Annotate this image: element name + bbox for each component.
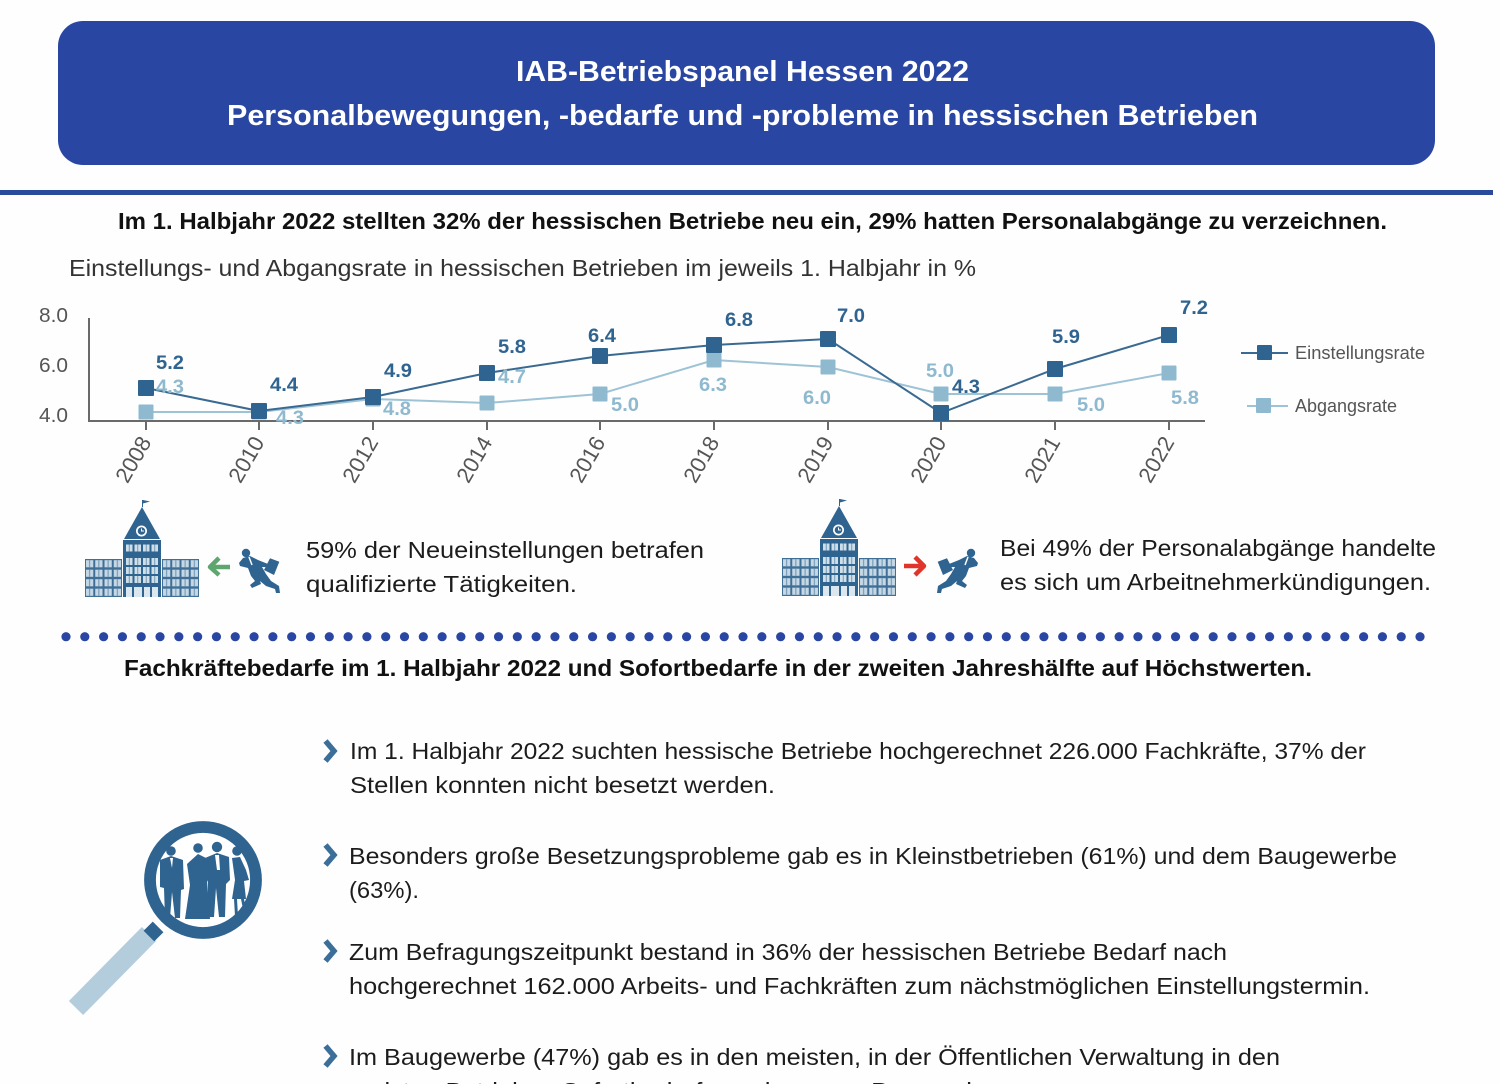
Abgangsrate value labels: [156, 361, 1199, 429]
Abgangsrate value labels: 4.7: [498, 367, 526, 388]
Abgangsrate value labels: 4.3: [156, 377, 184, 398]
chart title: Einstellungs- und Abgangsrate in hessischen Betrieben im jeweils 1. Halbjahr in %: [69, 255, 976, 281]
line chart: hiring and departure rates: [39, 298, 1425, 487]
Einstellungsrate value labels: 5.9: [1052, 327, 1080, 348]
x axis year labels: 2014: [451, 432, 497, 487]
Abgangsrate value labels: 6.0: [803, 388, 831, 409]
bullet: staffing problems: (63%).: [349, 877, 419, 903]
Einstellungsrate value labels: 4.3: [952, 377, 980, 398]
y axis labels: 4.0: [39, 405, 68, 427]
x axis year labels: 2019: [792, 432, 838, 487]
text: employee resignations: Bei 49% der Personalabgänge handelte: [1000, 535, 1436, 561]
header banner: [58, 21, 1435, 165]
text: qualified hires: 59% der Neueinstellungen betrafen: [306, 537, 704, 563]
bullet: immediate demand: [326, 939, 1370, 999]
bullet: skilled worker search: Im 1. Halbjahr 2022 suchten hessische Betriebe hochgerechnet 226.000 Fachkräfte, 37% der: [350, 738, 1366, 764]
x axis year labels: 2010: [223, 432, 269, 487]
Einstellungsrate value labels: 5.2: [156, 353, 184, 374]
heading: hiring summary: Im 1. Halbjahr 2022 stellten 32% der hessischen Betriebe neu ein, 29% hatten Personalabgänge zu verzeichnen.: [118, 208, 1387, 234]
text: employee resignations: [1000, 535, 1436, 595]
building: [782, 499, 896, 596]
running employee: [937, 549, 978, 593]
arrow: [210, 558, 230, 575]
x axis year labels: 2012: [337, 432, 383, 487]
Abgangsrate value labels: 4.8: [383, 399, 411, 420]
x axis year labels: 2022: [1133, 432, 1179, 487]
arrow: [904, 557, 924, 575]
Einstellungsrate value labels: 5.8: [498, 337, 526, 358]
y axis labels: 6.0: [39, 355, 68, 377]
legend: Einstellungsrate: [1295, 343, 1425, 363]
icon: magnifying glass over employees: [76, 827, 256, 1008]
lens ring: [150, 827, 256, 933]
building: [85, 500, 199, 597]
Einstellungsrate value labels: 7.2: [1180, 298, 1208, 319]
x axis year labels: 2020: [905, 432, 951, 487]
legend: Abgangsrate: [1295, 396, 1397, 416]
Abgangsrate value labels: 5.8: [1171, 388, 1199, 409]
Einstellungsrate value labels: [156, 298, 1208, 398]
heading: skilled worker demand: Fachkräftebedarfe im 1. Halbjahr 2022 und Sofortbedarfe in der zweiten Jahreshälfte auf Höchstwerten.: [124, 655, 1312, 681]
bullet: construction and public administration: Im Baugewerbe (47%) gab es in den meisten, in der Öffentlichen Verwaltung in den: [349, 1044, 1280, 1070]
legend: [1241, 343, 1425, 416]
Einstellungsrate value labels: 6.8: [725, 310, 753, 331]
x axis year labels: [110, 432, 1179, 487]
x axis year labels: 2021: [1019, 432, 1065, 487]
icon: building, arrow and incoming employee: [85, 500, 280, 597]
Abgangsrate value labels: 5.0: [611, 395, 639, 416]
text: qualified hires: qualifizierte Tätigkeiten.: [306, 571, 577, 597]
group of employees: [160, 842, 249, 919]
Einstellungsrate value labels: 7.0: [837, 306, 865, 327]
bullet: skilled worker search: [326, 738, 1366, 798]
header banner: IAB-Betriebspanel Hessen 2022: [516, 56, 969, 88]
Abgangsrate value labels: 6.3: [699, 375, 727, 396]
Abgangsrate value labels: 4.3: [276, 408, 304, 429]
x axis year labels: 2008: [110, 432, 156, 487]
Abgangsrate value labels: 5.0: [1077, 395, 1105, 416]
bullet: skilled worker search: Stellen konnten nicht besetzt werden.: [350, 772, 775, 798]
x axis year labels: 2016: [564, 432, 610, 487]
text: employee resignations: es sich um Arbeitnehmerkündigungen.: [1000, 569, 1431, 595]
chart axes: [89, 318, 1205, 430]
bullet: construction and public administration: [326, 1044, 1280, 1084]
series: Einstellungsrate: [138, 327, 1177, 421]
Einstellungsrate value labels: 4.4: [270, 375, 298, 396]
Abgangsrate value labels: 5.0: [926, 361, 954, 382]
Einstellungsrate value labels: 6.4: [588, 326, 616, 347]
handle: [76, 922, 163, 1008]
y axis labels: 8.0: [39, 305, 68, 327]
x axis year labels: 2018: [678, 432, 724, 487]
running employee: [239, 549, 280, 593]
bullet: staffing problems: Besonders große Besetzungsprobleme gab es in Kleinstbetrieben (61%) und dem Baugewerbe: [349, 843, 1397, 869]
header banner: Personalbewegungen, -bedarfe und -probleme in hessischen Betrieben: [227, 100, 1258, 132]
bullet: staffing problems: [326, 843, 1397, 903]
series: Abgangsrate: [138, 352, 1176, 420]
icon: building, arrow and leaving employee: [782, 499, 978, 596]
bullet: immediate demand: Zum Befragungszeitpunkt bestand in 36% der hessischen Betriebe Bedarf nach: [349, 939, 1227, 965]
Einstellungsrate value labels: 4.9: [384, 361, 412, 382]
y axis labels: [39, 305, 68, 427]
text: qualified hires: [306, 537, 704, 597]
bullet: immediate demand: hochgerechnet 162.000 Arbeits- und Fachkräften zum nächstmöglichen Einstellungstermin.: [349, 973, 1370, 999]
